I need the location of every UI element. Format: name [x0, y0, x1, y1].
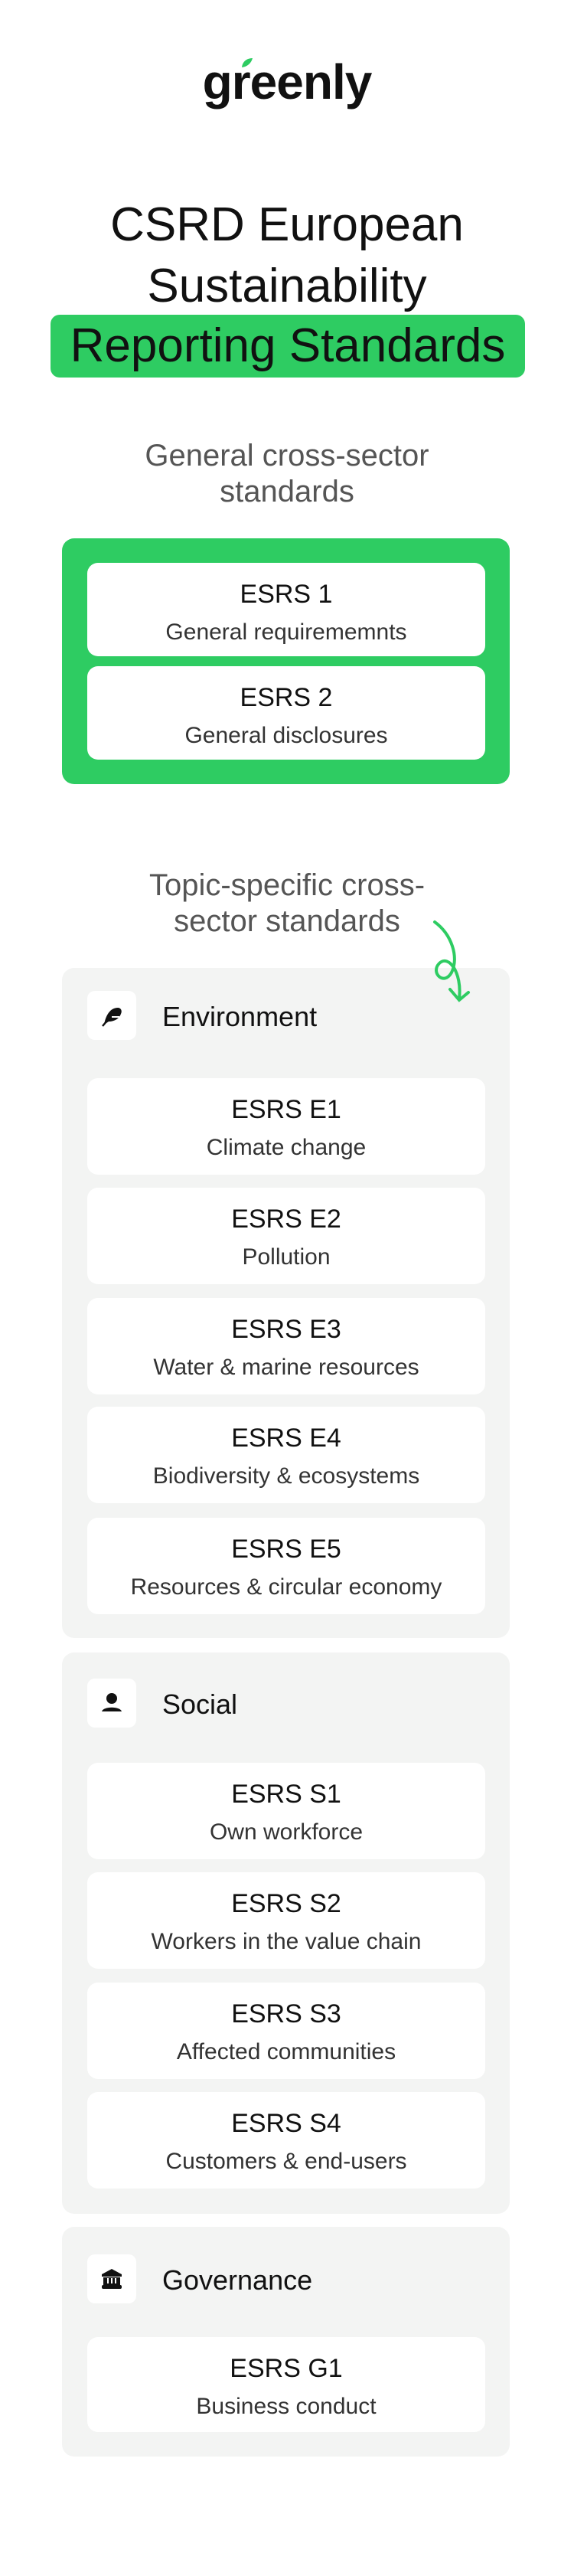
card: E5 [87, 1518, 485, 1614]
card: S4 [87, 2092, 485, 2189]
card: ESRS 1: ESRS 1 [240, 580, 332, 609]
card: S4: Customers & end-users [165, 2149, 407, 2174]
subtitle: general: standards [220, 475, 354, 508]
card: S4: ESRS S4 [231, 2109, 341, 2138]
card: S1: Own workforce [210, 1819, 363, 1845]
icon: person [87, 1679, 136, 1728]
card: E4: ESRS E4 [231, 1424, 341, 1453]
card: S2 [87, 1872, 485, 1969]
card: S2: Workers in the value chain [152, 1929, 421, 1954]
card: S2: ESRS S2 [231, 1889, 341, 1918]
subtitle: general: General cross-sector [145, 439, 429, 472]
panel: environment [62, 968, 510, 1638]
panel: social [62, 1652, 510, 2214]
card: E4 [87, 1407, 485, 1503]
icon: leaf [87, 991, 136, 1040]
card: E3 [87, 1298, 485, 1394]
card: E3: Water & marine resources [153, 1355, 419, 1380]
subtitle: topic-specific [149, 868, 425, 938]
card: G1: Business conduct [196, 2394, 377, 2419]
title: Sustainability [147, 260, 427, 312]
card: ESRS 2: ESRS 2 [240, 683, 332, 712]
card: G1: ESRS G1 [230, 2354, 343, 2383]
card: S3: Affected communities [177, 2039, 396, 2064]
card: S1: ESRS S1 [231, 1780, 341, 1809]
logo: greenly [203, 54, 371, 110]
title: CSRD European [110, 198, 464, 251]
card: ESRS 1: General requirememnts [165, 619, 407, 645]
heading: social: Social [162, 1688, 237, 1720]
card: G1 [87, 2337, 485, 2432]
card: S3: ESRS S3 [231, 1999, 341, 2028]
subtitle: general [145, 439, 429, 508]
card: E1 [87, 1078, 485, 1175]
card: S1 [87, 1763, 485, 1859]
card: E5: Resources & circular economy [131, 1574, 442, 1600]
subtitle: topic-specific: Topic-specific cross- [149, 868, 425, 902]
card: ESRS 1 [87, 563, 485, 656]
card: ESRS 2: General disclosures [184, 723, 388, 748]
arrow [433, 920, 470, 1002]
card: E4: Biodiversity & ecosystems [153, 1463, 419, 1489]
heading: governance: Governance [162, 2264, 312, 2296]
panel: general standards [62, 538, 510, 784]
title highlight: Reporting Standards [70, 319, 505, 372]
card: E2: Pollution [242, 1244, 331, 1270]
icon: building [87, 2254, 136, 2303]
card: E2 [87, 1188, 485, 1284]
card: E1: Climate change [207, 1135, 366, 1160]
heading: environment: Environment [162, 1001, 317, 1032]
subtitle: topic-specific: sector standards [174, 904, 400, 938]
card: E5: ESRS E5 [231, 1535, 341, 1564]
card: ESRS 2 [87, 666, 485, 760]
title [110, 198, 464, 312]
panel: governance [62, 2227, 510, 2457]
card: E2: ESRS E2 [231, 1205, 341, 1234]
card: E1: ESRS E1 [231, 1095, 341, 1124]
card: S3 [87, 1983, 485, 2079]
card: E3: ESRS E3 [231, 1315, 341, 1344]
